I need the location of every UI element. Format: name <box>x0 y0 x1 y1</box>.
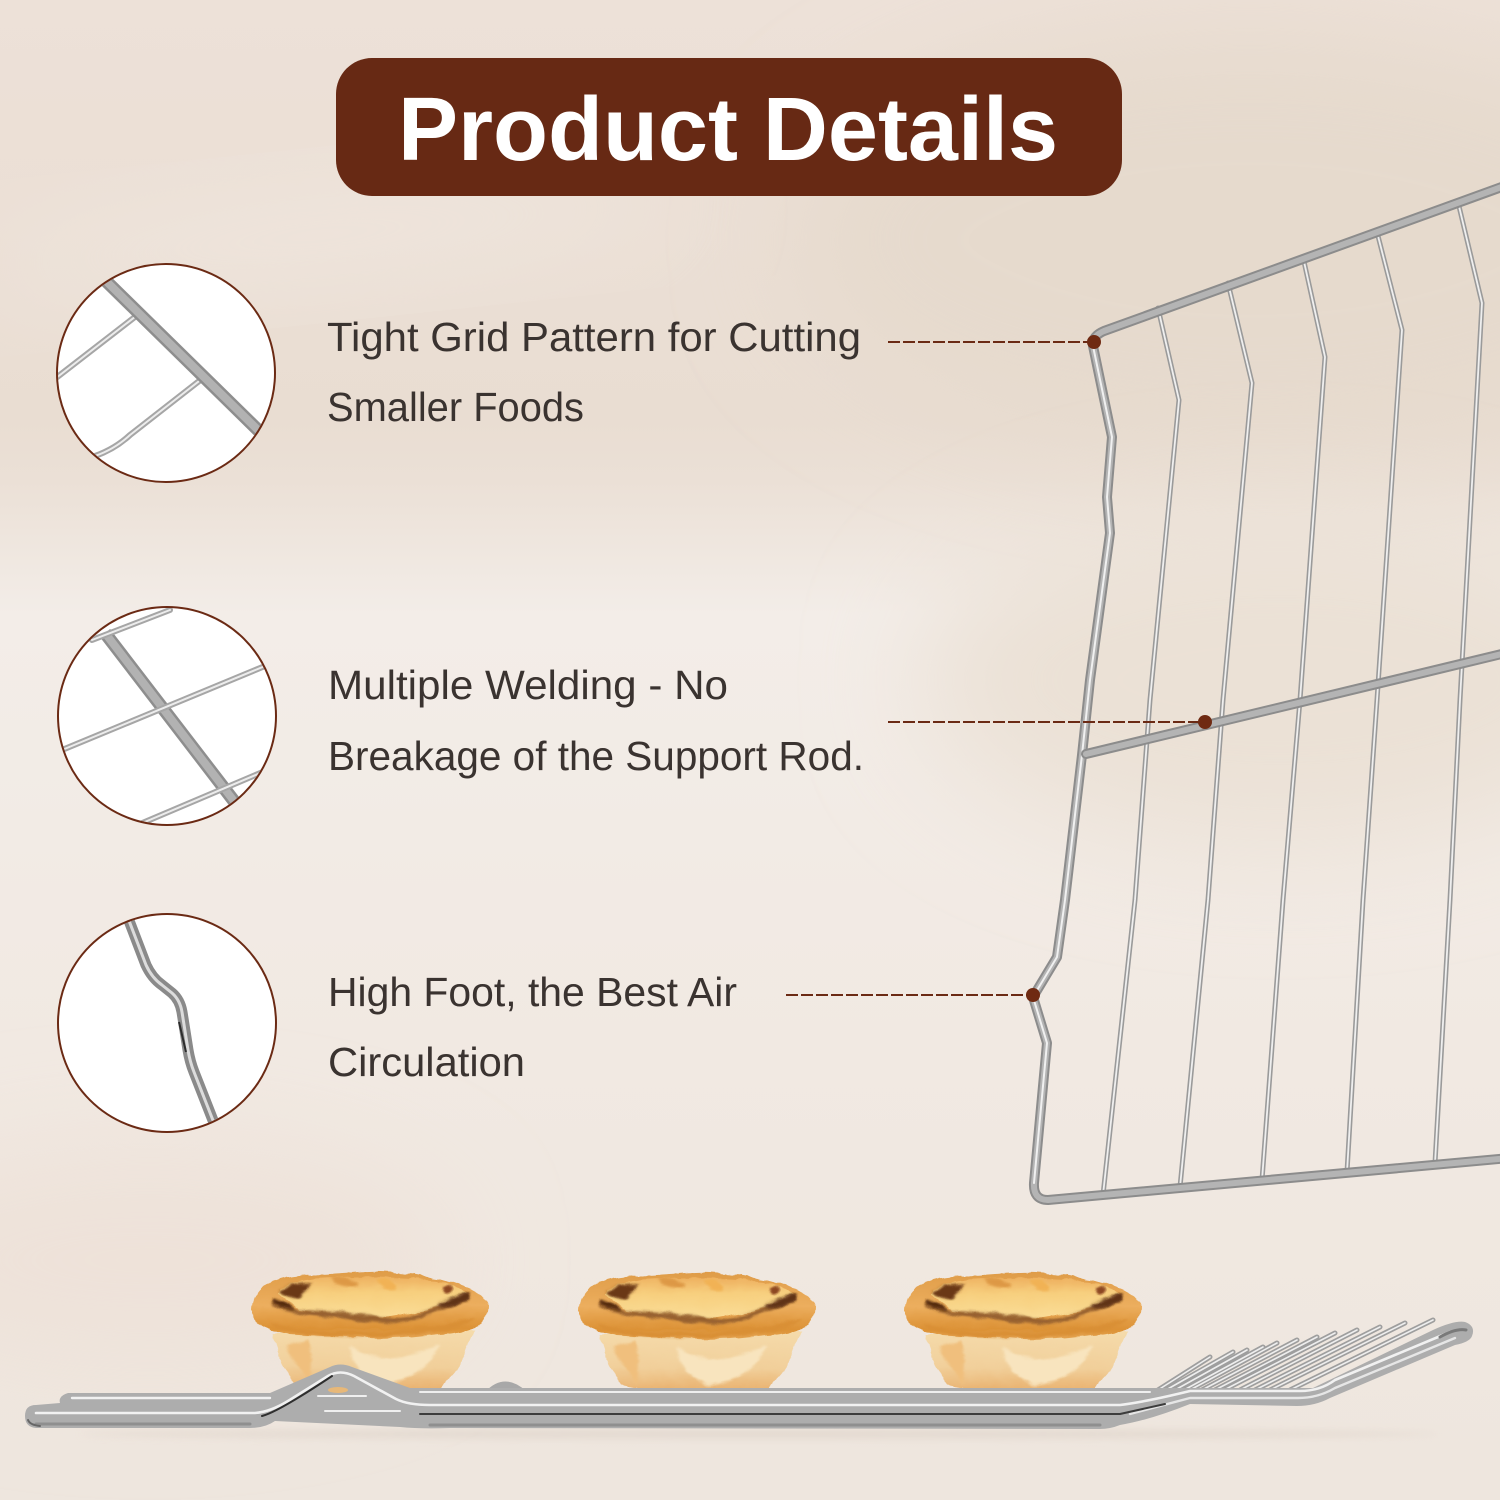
leader: multiple welding <box>888 715 1212 729</box>
detail circle: tight grid <box>56 264 275 482</box>
title pill <box>336 58 1122 196</box>
rack outer frame <box>1033 184 1500 1200</box>
cooling rack, side view <box>25 1320 1473 1439</box>
detail circle: multiple welding <box>58 607 276 825</box>
rack wires <box>1103 202 1482 1195</box>
detail circle: high foot <box>58 914 276 1132</box>
text: high foot <box>328 969 737 1085</box>
leader: tight grid <box>888 335 1101 349</box>
orange spot under bump <box>328 1387 348 1393</box>
egg tart 2 <box>579 1272 815 1394</box>
egg tart 3 <box>905 1272 1141 1394</box>
leader: high foot <box>786 988 1040 1002</box>
side view rod body <box>25 1322 1473 1429</box>
title text: Product Details <box>398 80 1058 180</box>
side view fan of wires <box>1158 1320 1433 1390</box>
text: multiple welding: Breakage of the Support Rod. <box>328 733 864 779</box>
side view small bump <box>488 1385 524 1394</box>
text: tight grid: Smaller Foods <box>327 384 584 430</box>
text: high foot: Circulation <box>328 1039 525 1085</box>
text: high foot: High Foot, the Best Air <box>328 969 737 1015</box>
text: multiple welding <box>328 662 864 779</box>
side view shadow <box>80 1429 1440 1439</box>
side view highlights <box>28 1330 1466 1426</box>
text: tight grid <box>327 314 861 430</box>
egg tart 1 <box>252 1271 488 1393</box>
text: tight grid: Tight Grid Pattern for Cutting <box>327 314 861 360</box>
text: multiple welding: Multiple Welding - No <box>328 662 728 708</box>
rack cross rail <box>1086 652 1500 754</box>
cooling rack, top view <box>1033 184 1500 1200</box>
